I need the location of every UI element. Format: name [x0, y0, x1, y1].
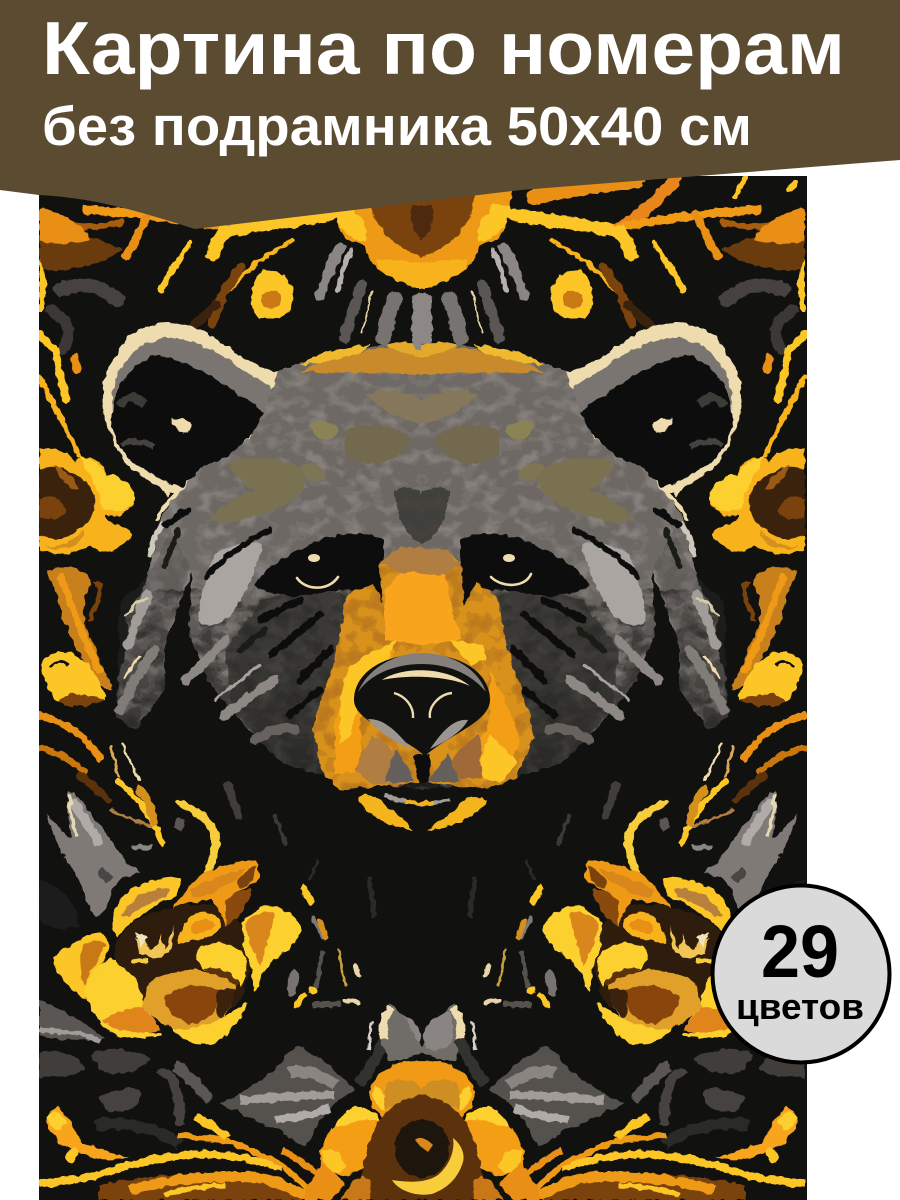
bottom central flower — [320, 1061, 424, 1200]
bear eyes — [297, 554, 531, 588]
yellow curl above large flower — [179, 803, 216, 872]
bottom crescent — [172, 1003, 247, 1044]
gray petals under top flower — [320, 248, 424, 342]
lower cheek shadow — [225, 590, 345, 775]
header banner — [0, 0, 900, 229]
right petal — [242, 905, 302, 992]
badge: 29 colours: цветов — [736, 986, 864, 1027]
top-right petal — [172, 860, 260, 927]
gray bottom petals — [360, 1003, 465, 1085]
mottled fur texture — [100, 340, 424, 800]
mirrored right half of painting — [379, 177, 805, 1200]
subtitle: без подрамника 50х40 см — [42, 95, 752, 157]
side leaves — [46, 567, 112, 690]
light fur strokes — [120, 492, 295, 740]
center dabs on chest — [292, 860, 374, 1006]
bear mouth — [357, 795, 487, 830]
lower left leaf sprays — [39, 716, 162, 843]
yellow blossom near ear — [180, 268, 293, 335]
title: Картина по номерам — [42, 6, 845, 90]
bottom bulb — [142, 969, 236, 1029]
bear nose — [354, 653, 490, 756]
large left flower — [52, 860, 302, 1044]
light cheek patch — [198, 542, 262, 625]
painting: bear with folk flowers — [39, 176, 807, 1200]
center right petal — [196, 943, 247, 987]
lower-left yellow petal — [84, 958, 160, 1034]
yellow side bud — [42, 652, 106, 706]
left half of symmetric painting — [39, 177, 465, 1200]
badge: 29 colours — [712, 886, 890, 1062]
bottom flower crescent and stamens — [392, 1138, 464, 1195]
top left brown leaf cluster — [39, 208, 122, 312]
top central flower — [332, 184, 424, 290]
gray side leaves — [39, 785, 285, 929]
ear — [102, 323, 300, 500]
bear muzzle — [310, 545, 535, 795]
cream stamen — [136, 925, 175, 958]
top-left petal — [112, 878, 180, 937]
eye patch — [254, 534, 384, 610]
top leaf ornament — [49, 177, 330, 350]
center small petal — [177, 913, 222, 943]
badge: 29 colours: 29 — [761, 910, 839, 993]
side flower and stem — [39, 333, 135, 554]
mottled dark texture — [100, 590, 424, 800]
fur olive and crown patches — [210, 343, 424, 522]
dark fur streaks — [165, 510, 330, 715]
bear head fur — [100, 340, 424, 800]
left petal — [52, 932, 109, 1000]
bottom leaf ornament — [39, 1107, 345, 1200]
brown heart — [114, 904, 250, 1021]
gray bottom foliage — [39, 1000, 355, 1147]
